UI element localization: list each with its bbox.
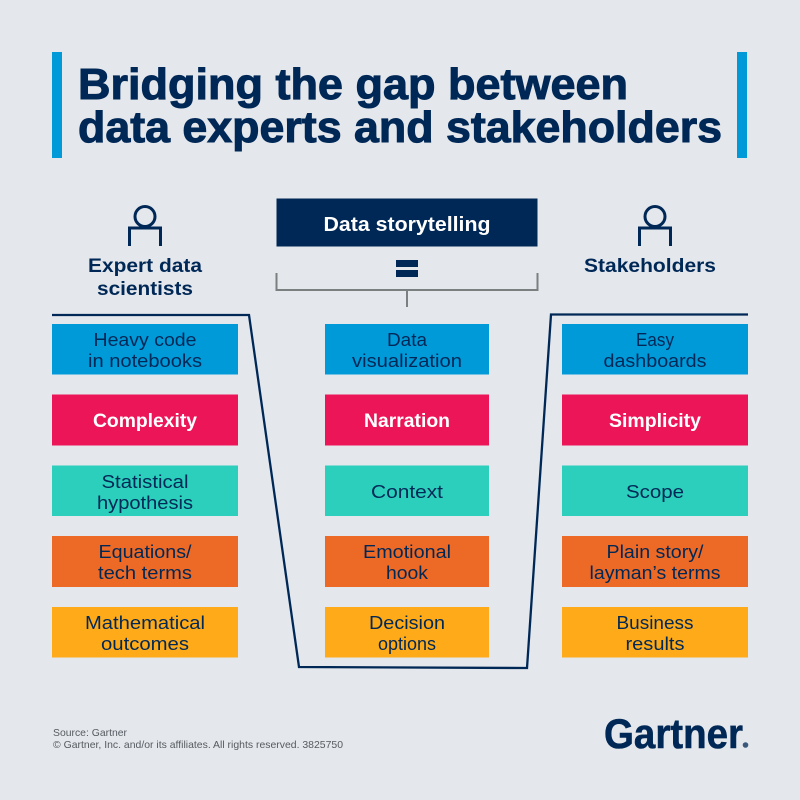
box: heavy code in notebooks: in notebooks <box>88 351 202 371</box>
box: business results: results <box>626 634 684 654</box>
box: heavy code in notebooks <box>52 324 238 374</box>
box: easy dashboards: Easy <box>636 330 674 350</box>
box: mathematical outcomes: Mathematical <box>85 613 205 633</box>
box: equations tech terms <box>52 536 238 587</box>
box: simplicity <box>562 394 748 446</box>
title text: data experts and stakeholders <box>78 104 722 152</box>
left accent bar <box>52 52 62 158</box>
right accent bar <box>737 52 747 158</box>
box: decision options <box>325 607 489 658</box>
box: business results <box>562 607 748 658</box>
box: equations tech terms: tech terms <box>98 563 192 583</box>
panel: data storytelling <box>276 198 538 658</box>
box: heavy code in notebooks: Heavy code <box>94 330 196 350</box>
box: statistical hypothesis <box>52 466 238 516</box>
logo: Gartner: Gartner <box>604 710 743 757</box>
box: data visualization: visualization <box>352 351 462 371</box>
box: mathematical outcomes: outcomes <box>101 634 189 654</box>
source note: © Gartner, Inc. and/or its affiliates. All rights reserved. 3825750 <box>53 739 343 751</box>
bracket <box>276 273 538 307</box>
title block <box>52 52 747 158</box>
box: narration: Narration <box>364 411 450 432</box>
box: complexity <box>52 394 238 446</box>
heading: stakeholders: Stakeholders <box>584 256 716 277</box>
box: statistical hypothesis: hypothesis <box>97 493 193 513</box>
panel: stakeholders <box>562 206 748 658</box>
box: business results: Business <box>616 613 694 633</box>
funnel outline <box>52 314 748 668</box>
box: scope: Scope <box>626 482 684 502</box>
heading: expert data scientists: scientists <box>97 279 193 300</box>
heading: expert data scientists: Expert data <box>88 256 202 277</box>
title text: Bridging the gap between <box>78 61 628 109</box>
box: data visualization: Data <box>387 330 428 350</box>
box: plain story layman's terms: Plain story/ <box>606 542 704 562</box>
box: scope <box>562 466 748 516</box>
icon: person <box>640 206 670 246</box>
box: mathematical outcomes <box>52 607 238 658</box>
box: context: Context <box>371 482 443 502</box>
box: data visualization <box>325 324 489 374</box>
source note: Source: Gartner <box>53 727 127 739</box>
box: equations tech terms: Equations/ <box>98 542 192 562</box>
box: statistical hypothesis: Statistical <box>102 472 188 492</box>
box: plain story layman's terms <box>562 536 748 587</box>
box: plain story layman's terms: layman’s terms <box>590 563 720 583</box>
box: narration <box>325 394 489 446</box>
box: easy dashboards <box>562 324 748 374</box>
heading box: data storytelling <box>276 198 538 246</box>
box: simplicity: Simplicity <box>609 411 701 432</box>
box: complexity: Complexity <box>93 411 197 432</box>
box: decision options: Decision <box>369 613 445 633</box>
box: emotional hook: Emotional <box>363 542 451 562</box>
box: easy dashboards: dashboards <box>604 351 706 371</box>
panel: expert data scientists <box>52 206 238 658</box>
heading box: data storytelling: Data storytelling <box>324 214 490 236</box>
box: decision options: options <box>378 634 436 654</box>
equals sign <box>396 260 418 277</box>
box: context <box>325 466 489 516</box>
icon: person <box>130 206 160 246</box>
box: emotional hook: hook <box>386 563 429 583</box>
box: emotional hook <box>325 536 489 587</box>
